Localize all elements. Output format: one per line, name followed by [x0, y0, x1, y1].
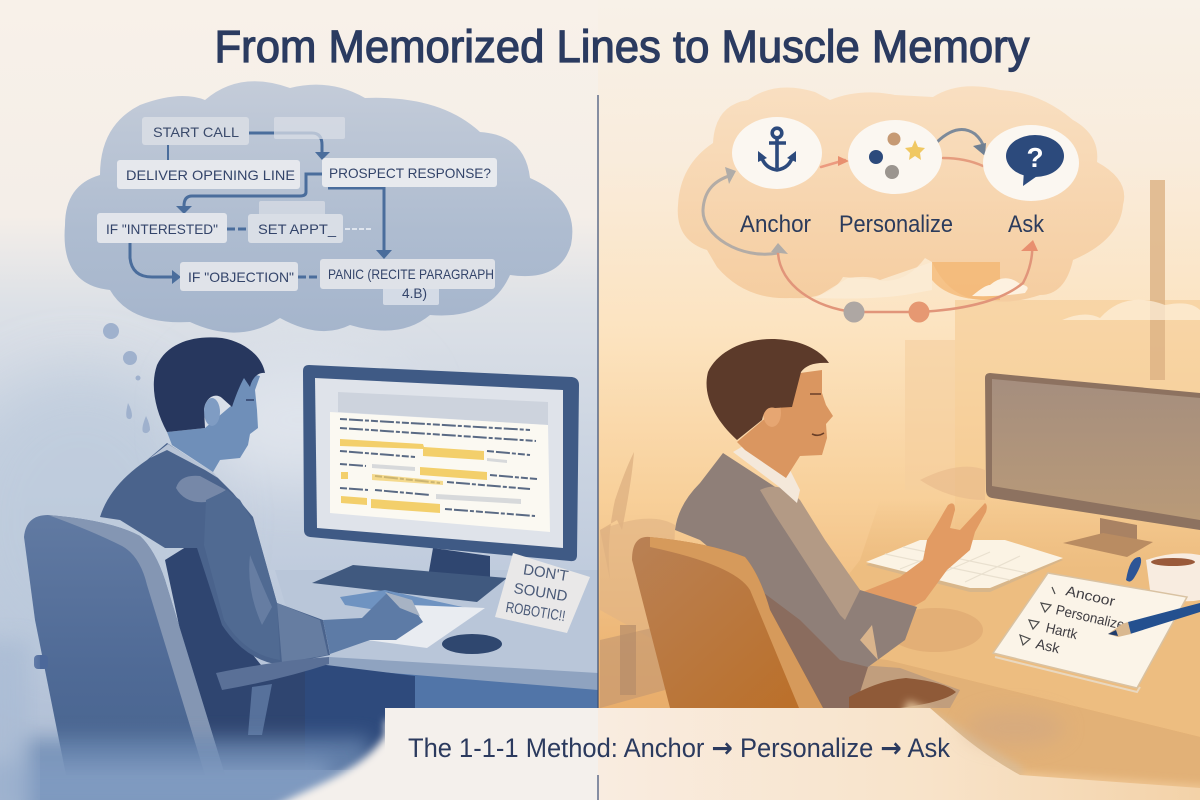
notepad checklist: [993, 573, 1187, 692]
notepad checklist: Ancoor: [1064, 582, 1117, 609]
notepad checklist: Personalize: [1054, 601, 1126, 633]
flow node: panic: 4.B): [402, 285, 427, 301]
thought cloud: 1-1-1 method: [678, 86, 1124, 322]
flow node: deliver opening line: DELIVER OPENING LINE: [126, 167, 295, 183]
flow node: blank box: [274, 117, 345, 139]
step labels: Anchor: [740, 211, 811, 238]
flow node: set appt: SET APPT_: [258, 221, 336, 237]
neck and face: [167, 372, 260, 472]
method caption: The 1-1-1 Method: Anchor → Personalize → Ask: [408, 733, 950, 764]
flow node: 4.B tab: [383, 286, 439, 305]
lower torso: [165, 540, 305, 770]
collar and neck: [733, 445, 800, 503]
flow node: panic: PANIC (RECITE PARAGRAPH: [328, 266, 494, 282]
flow node: blank box behind set appt: [259, 201, 325, 218]
flow node: if objection: [180, 262, 298, 291]
keyboard and mouse pad: scripted side: [340, 590, 502, 654]
thought cloud: flowchart: [65, 81, 572, 333]
flow node: set appt: [248, 214, 343, 243]
sticky note: [495, 553, 590, 633]
step labels: Ask: [1008, 211, 1045, 238]
flow node: if objection: IF "OBJECTION": [188, 269, 294, 285]
flow connectors: [130, 133, 392, 284]
method loop arrows: [703, 130, 1032, 312]
icon: anchor: [732, 117, 822, 189]
scripted bottom fog: [0, 640, 610, 800]
flow node: start call: START CALL: [153, 124, 239, 140]
monitor: natural side: [985, 373, 1200, 557]
desk: natural side: [790, 500, 1200, 800]
desk: scripted side: [275, 570, 598, 770]
jacket: [100, 443, 330, 665]
panel: scripted side background: [0, 0, 598, 800]
script document: [330, 412, 550, 532]
natural bottom fog: [598, 708, 1200, 800]
forearm and hand: [860, 503, 987, 607]
hair: [707, 339, 829, 440]
hair: [154, 337, 265, 432]
sticky note: DON'T: [522, 561, 569, 585]
title: From Memorized Lines to Muscle Memory: [214, 21, 1030, 72]
flow node: start call: [142, 117, 249, 145]
small cloud: [972, 278, 1028, 296]
sticky note: SOUND: [513, 580, 569, 605]
thought bubbles and sweat drops: [103, 323, 150, 433]
confident person: [632, 339, 987, 708]
step labels: Personalize: [839, 211, 953, 238]
center divider: [597, 95, 599, 800]
keyboard: natural side: [866, 540, 1063, 592]
flow node: panic: [320, 259, 495, 301]
jacket: [675, 453, 917, 667]
flow node: if interested: [97, 213, 227, 243]
scripted person: [24, 337, 423, 775]
monitor: scripted side: [303, 365, 579, 602]
icon: question bubble: ?: [1026, 142, 1044, 173]
hand on keyboard: [323, 592, 423, 654]
notepad checklist: Hartk: [1044, 619, 1080, 642]
flow node: prospect response: PROSPECT RESPONSE?: [329, 165, 491, 181]
chair leg: [248, 684, 272, 735]
sticky note: ROBOTIC!!: [505, 599, 566, 625]
chair: [24, 515, 225, 775]
step labels: [740, 211, 1045, 238]
flow node: prospect response: [322, 158, 497, 187]
notepad checklist: Ask: [1034, 635, 1062, 657]
pen: [1108, 603, 1200, 637]
coffee cup and pen cap: [1126, 553, 1200, 601]
lower torso: [745, 557, 868, 708]
flow node: deliver opening line: [117, 160, 300, 189]
panel: natural side background: [598, 0, 1200, 800]
chair: [632, 537, 823, 708]
icon: question bubble: [983, 125, 1079, 201]
flow node: if interested: IF "INTERESTED": [106, 221, 218, 237]
icon: personalize dots: [848, 120, 942, 194]
